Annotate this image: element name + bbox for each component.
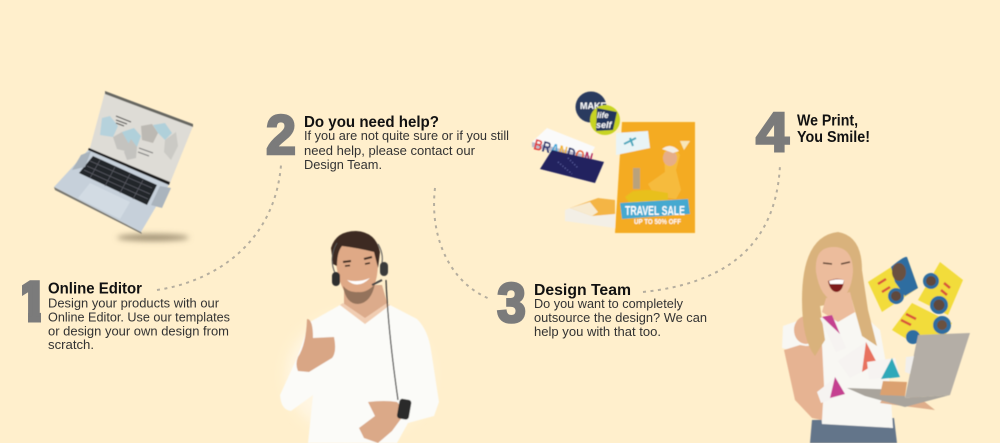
laptop (847, 333, 970, 410)
step 2 description: need help, please contact our (304, 144, 475, 158)
step 2 heading: Do you need help? (304, 114, 439, 131)
flying business cards (817, 315, 914, 403)
photo: support agent with headset giving thumbs up (280, 231, 439, 443)
icon: printed products group (532, 92, 695, 233)
step 2 number: 2 (266, 103, 296, 166)
step 2 description: If you are not quite sure or if you still (304, 129, 509, 143)
product: travel sale flyer (615, 122, 695, 233)
step 3 description: Do you want to completely (534, 297, 684, 311)
step 3 description: help you with that too. (534, 325, 661, 339)
step 3 description: outsource the design? We can (534, 311, 707, 325)
step 1 description: scratch. (48, 338, 94, 352)
product: travel sale flyer: UP TO 50% OFF (634, 217, 681, 226)
step 2 description (304, 129, 509, 172)
product: business cards (532, 128, 604, 183)
flying card: food flyer 2 (918, 262, 963, 315)
flying card: food flyer 3 (892, 303, 952, 344)
step 3 description (534, 297, 707, 339)
product: business cards: BRANDON (532, 136, 594, 167)
step 1 description: Online Editor. Use our templates (48, 310, 230, 324)
product: stickers: MAKE (580, 101, 606, 111)
step 1 number: 1 (17, 270, 48, 332)
step 1 description: or design your own design from (48, 324, 229, 338)
step 3 heading: Design Team (534, 282, 631, 299)
dashed connector: step 1 to step 2 (157, 165, 281, 290)
step 1 heading: Online Editor (48, 280, 142, 298)
product: stacked leaflets (565, 198, 615, 228)
step 2 description: Design Team. (304, 158, 382, 172)
dashed connector: step 2 to step 3 (434, 188, 490, 299)
dashed connector: step 3 to step 4 (643, 165, 780, 292)
step 3 number: 3 (497, 271, 526, 334)
product: travel sale flyer: TRAVEL SALE (625, 203, 685, 218)
step 4 heading: You Smile! (797, 129, 870, 146)
icon: laptop with online editor (54, 91, 193, 241)
step 1 description (48, 296, 230, 352)
product: stickers: self (596, 120, 613, 130)
flying card: food flyer 1 (868, 257, 918, 312)
photo: happy woman with laptop and flying prints (782, 232, 970, 443)
step 1 description: Design your products with our (48, 296, 219, 310)
product: stickers (576, 92, 620, 135)
step 4 heading: We Print, (797, 112, 858, 130)
product: stickers: life (597, 111, 609, 120)
step 4 number: 4 (756, 100, 789, 164)
step 4 heading (797, 112, 870, 146)
